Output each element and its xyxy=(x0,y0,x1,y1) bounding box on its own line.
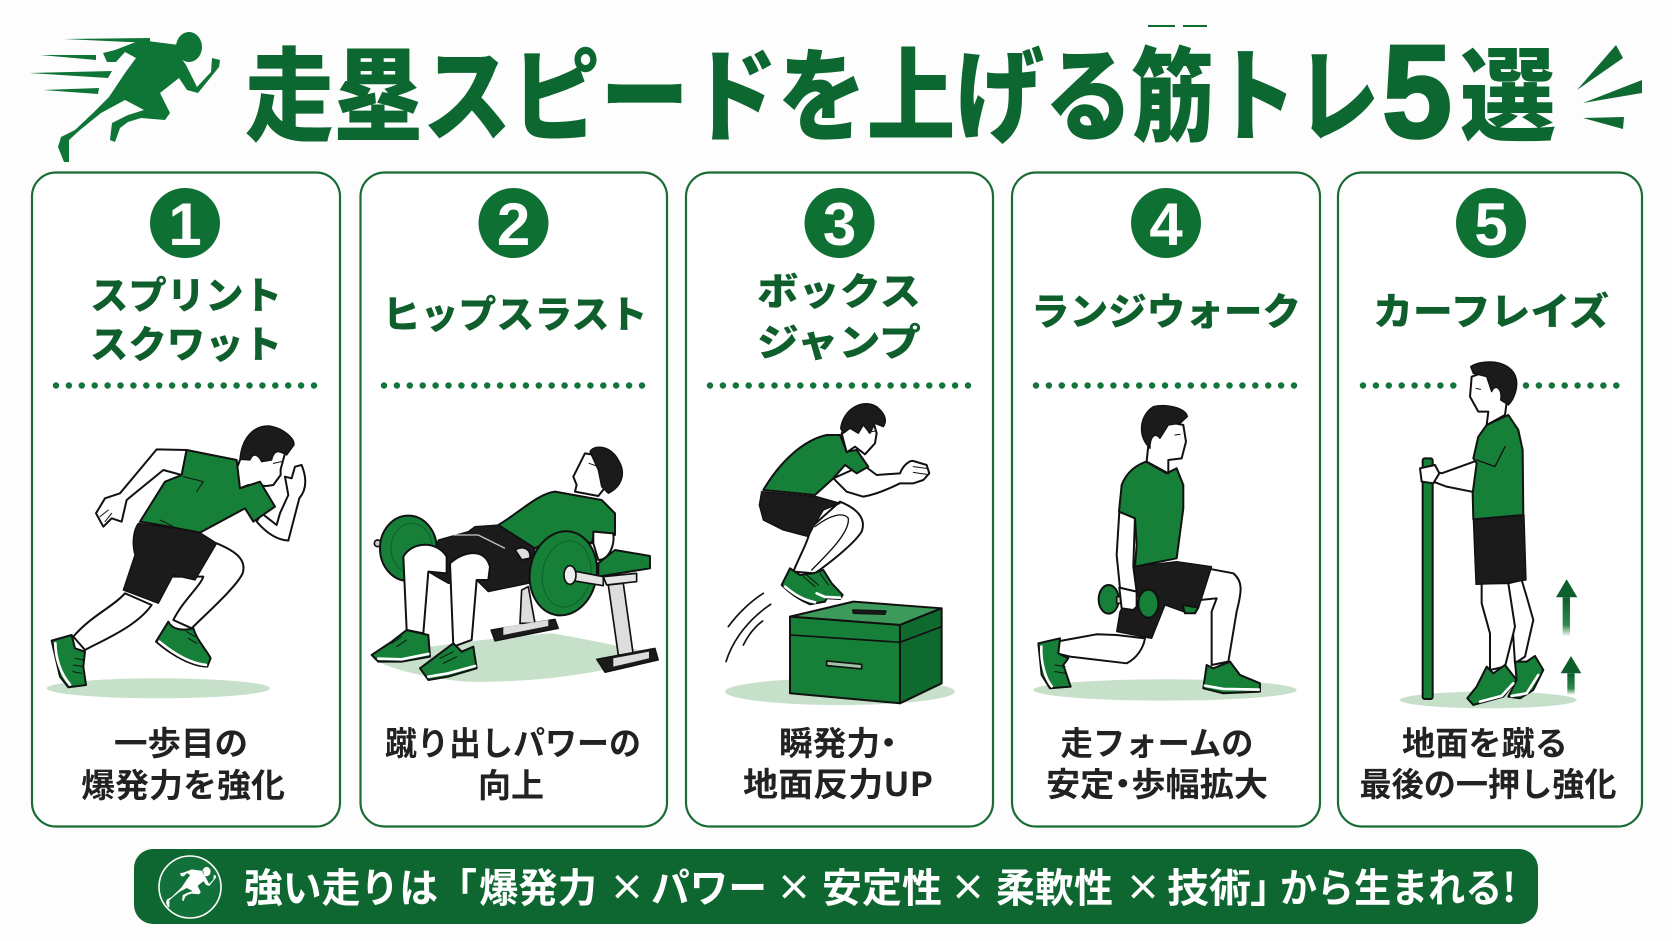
banner text: 技術 xyxy=(1167,856,1251,914)
description 5: 地面を蹴る xyxy=(1402,717,1568,765)
banner text: 強い走りは xyxy=(244,856,438,914)
title: 筋トレ xyxy=(1131,16,1379,163)
callout: bottom banner xyxy=(134,849,1538,924)
illustration: box jump xyxy=(725,404,955,705)
panel: card 4 lunge walk xyxy=(1012,172,1320,826)
number badge 3 xyxy=(804,188,874,258)
panel: card 1 sprint squat xyxy=(32,172,340,826)
icon: emphasis burst xyxy=(1148,25,1642,129)
description 3: 地面反力UP xyxy=(743,758,933,806)
heading: lunge walk: ランジウォーク xyxy=(1031,281,1301,336)
heading: calf raise: カーフレイズ xyxy=(1373,281,1609,336)
number badge 5: 5 xyxy=(1474,191,1508,258)
illustration: lunge with dumbbells xyxy=(1033,406,1297,701)
icon: runner in circle xyxy=(159,856,221,918)
banner text: × xyxy=(950,859,994,911)
banner text: × xyxy=(776,859,820,911)
illustration: calf raise with pole and arrows xyxy=(1400,362,1581,708)
number badge 4: 4 xyxy=(1149,191,1183,258)
banner text: 爆発力 xyxy=(479,856,597,914)
panel: card 3 box jump xyxy=(686,172,993,826)
heading: sprint squat: スクワット xyxy=(90,314,282,369)
illustration: hip thrust on bench xyxy=(372,447,658,682)
panel: card 5 calf raise xyxy=(1338,172,1642,826)
number badge 4 xyxy=(1131,188,1201,258)
heading: box jump: ジャンプ xyxy=(757,312,921,367)
description 1: 爆発力を強化 xyxy=(81,759,285,807)
banner text: × xyxy=(1125,859,1169,911)
description 2: 向上 xyxy=(478,759,544,807)
heading: box jump: ボックス xyxy=(757,261,921,316)
panel: card 2 hip thrust xyxy=(360,172,667,826)
heading: hip thrust: ヒップスラスト xyxy=(382,284,648,339)
number badge 2 xyxy=(478,188,548,258)
title: 5 xyxy=(1382,18,1452,165)
number badge 1: 1 xyxy=(168,191,202,258)
banner text: 「 xyxy=(437,856,477,914)
title: 走塁スピードを上げる xyxy=(245,16,1133,163)
banner text: 」 xyxy=(1250,856,1290,914)
title: 選 xyxy=(1460,16,1556,163)
description 4: 走フォームの xyxy=(1060,717,1254,765)
icon: sprinter logo xyxy=(29,32,220,162)
description 3: 瞬発力・ xyxy=(779,717,897,765)
description 4: 安定・歩幅拡大 xyxy=(1046,758,1268,806)
banner text: から生まれる! xyxy=(1280,856,1516,914)
description 5: 最後の一押し強化 xyxy=(1360,758,1616,806)
banner text: × xyxy=(609,859,653,911)
number badge 5 xyxy=(1456,188,1526,258)
illustration: sprinter xyxy=(47,426,305,698)
number badge 3: 3 xyxy=(823,191,856,258)
banner text: パワー xyxy=(651,856,767,914)
description 2: 蹴り出しパワーの xyxy=(385,717,641,765)
heading: sprint squat: スプリント xyxy=(90,265,282,320)
description 1: 一歩目の xyxy=(114,717,248,765)
number badge 2: 2 xyxy=(497,191,530,258)
banner text: 柔軟性 xyxy=(996,856,1113,914)
banner text: 安定性 xyxy=(822,856,942,914)
number badge 1 xyxy=(150,188,220,258)
